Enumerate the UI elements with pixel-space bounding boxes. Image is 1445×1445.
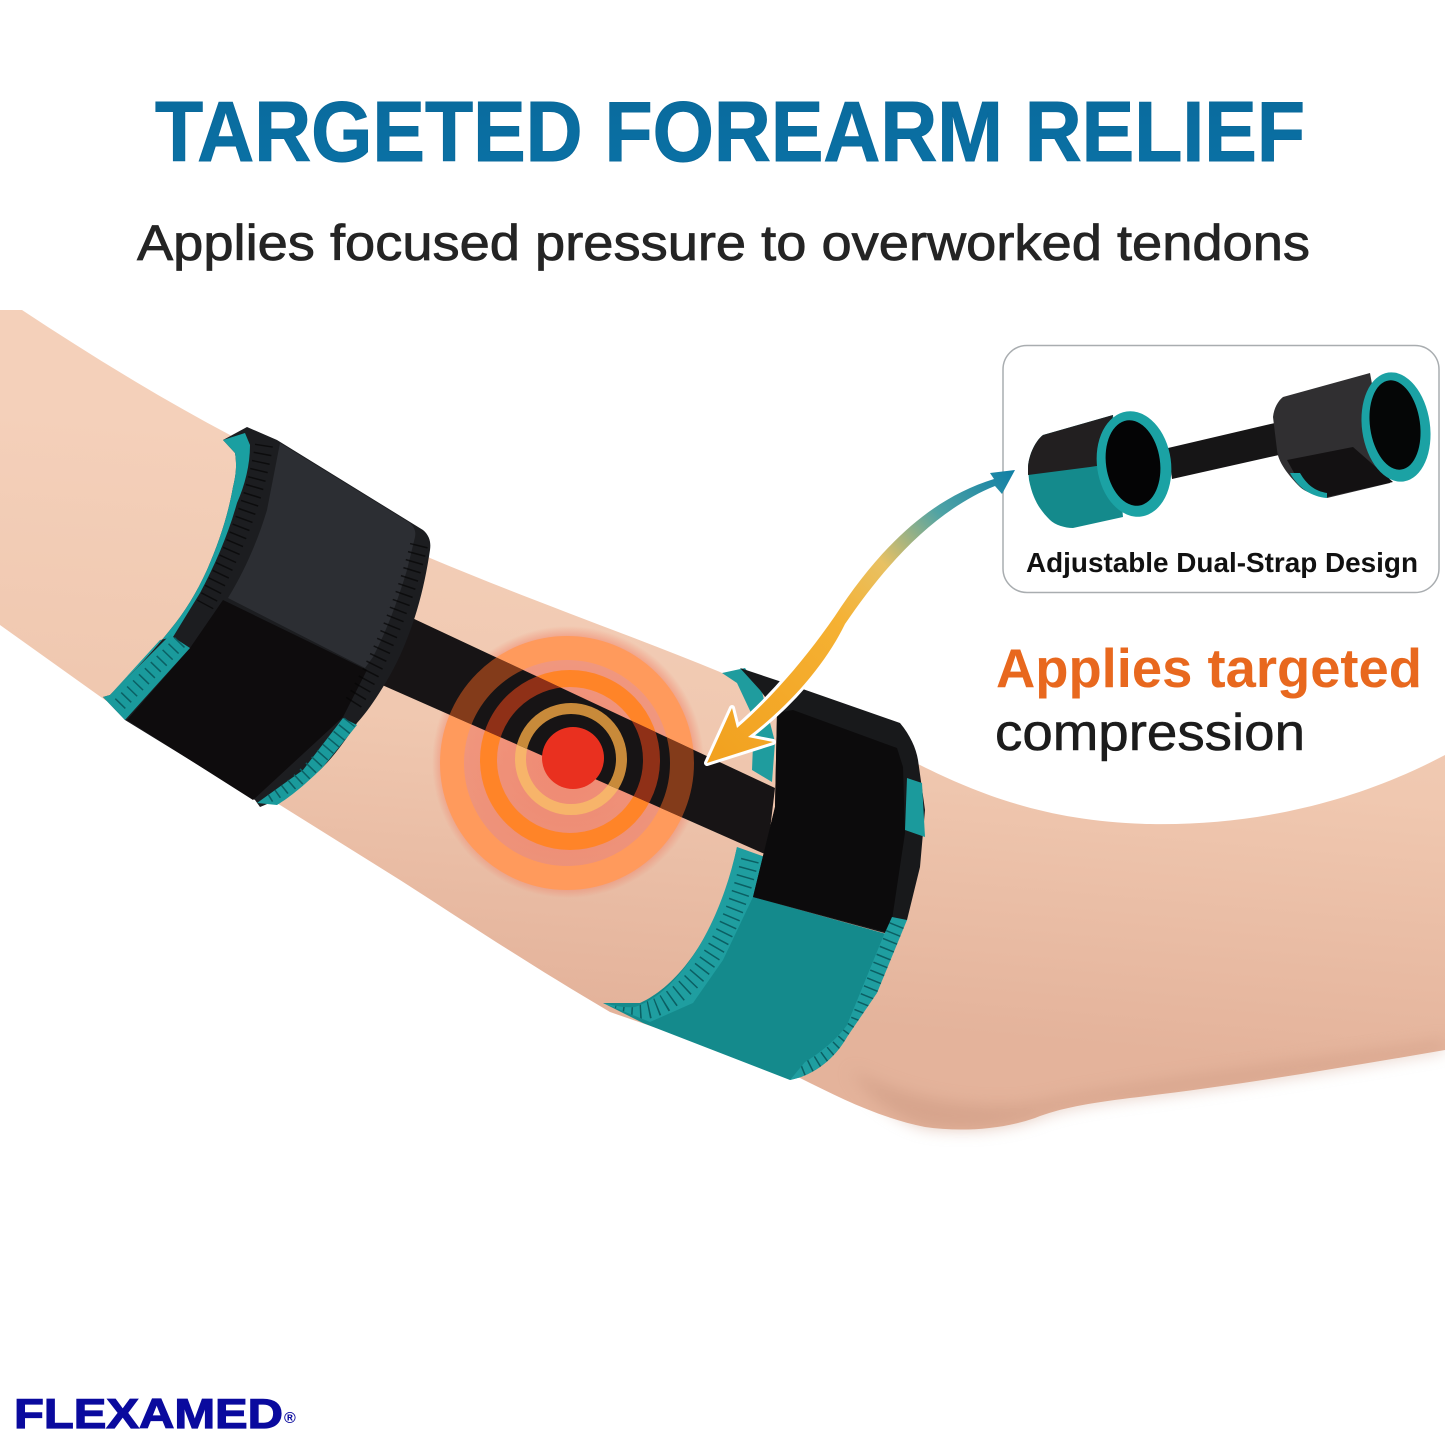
arm shading (850, 1040, 1445, 1130)
right band rim behind strap (603, 668, 890, 1080)
callout orange line: Applies targeted (996, 637, 1422, 699)
left band teal lower right edge (257, 718, 357, 805)
arrow shaft and heads (707, 470, 1015, 763)
arm skin (0, 310, 1445, 1130)
left band teal stitches (116, 642, 350, 803)
right band lower right rim (790, 917, 907, 1080)
right band teal notch (905, 778, 925, 837)
right band black section (740, 668, 925, 1080)
arrow to target (707, 470, 1015, 763)
left band dark stitches (205, 445, 419, 708)
callout black line: compression (995, 704, 1305, 762)
pain target rings on skin (452, 648, 682, 878)
left band teal rim (110, 433, 250, 695)
right band black body (740, 668, 925, 935)
subtitle: Applies focused pressure to overworked tendons (137, 215, 1310, 271)
product: connecting strap (1168, 423, 1279, 479)
right band lower teal panel (603, 847, 890, 1080)
right band lower right stitches (800, 925, 897, 1072)
strap (380, 617, 775, 855)
right band upper teal rim (722, 668, 775, 782)
product: left cuff (1028, 406, 1178, 528)
left band teal corner (103, 635, 190, 720)
left band grey panel (228, 443, 415, 668)
inset panel: dual-strap product (1003, 346, 1439, 592)
right band velcro panel (753, 710, 905, 933)
right band lower left stitches (615, 860, 750, 1011)
logo: Flexamed: FLEXAMED (14, 1390, 283, 1437)
pain target glow (432, 626, 704, 898)
pain target rings over strap (450, 658, 694, 818)
inset border (1003, 346, 1439, 592)
callout: applies targeted compression (995, 637, 1422, 762)
inset caption: Adjustable Dual-Strap Design (1026, 547, 1418, 578)
pain target centre (542, 727, 604, 789)
left band outer shape (103, 427, 430, 807)
product: right cuff (1273, 368, 1437, 498)
arm photo illustration (0, 310, 1445, 1130)
right band lower left rim (603, 847, 765, 1022)
title: TARGETED FOREARM RELIEF (155, 85, 1305, 180)
logo: Flexamed: ® (284, 1410, 296, 1427)
arrow white outline (707, 617, 845, 763)
left band (103, 427, 430, 807)
left band velcro panel (127, 600, 367, 800)
